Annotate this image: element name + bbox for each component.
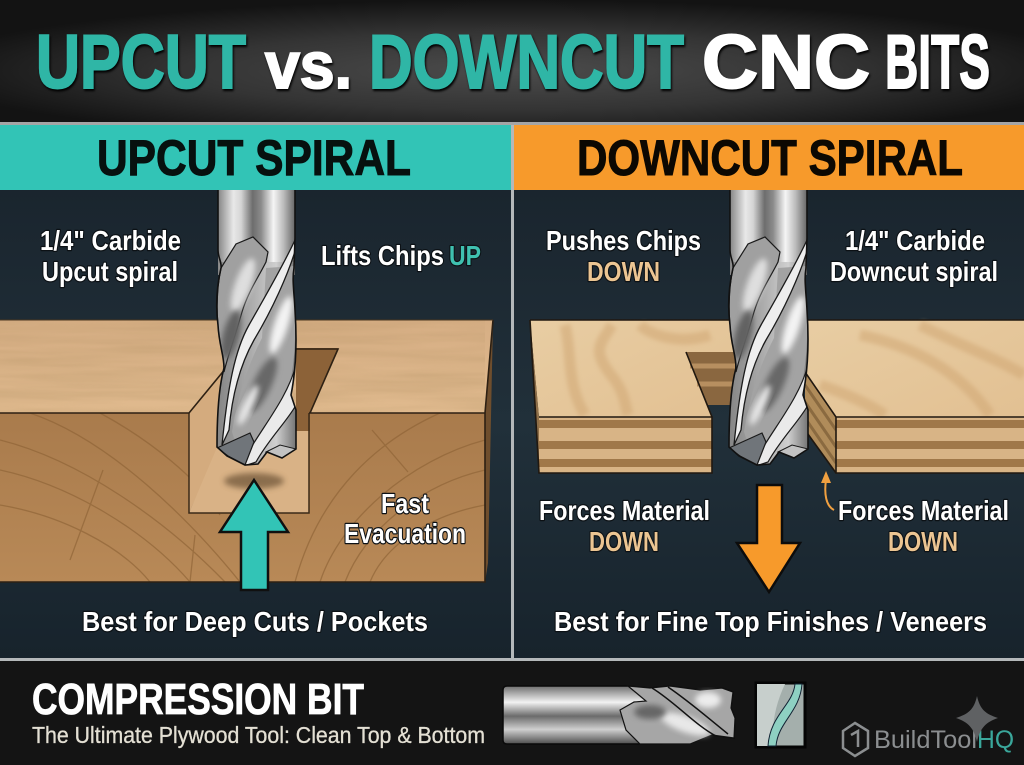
- footer subtitle: The Ultimate Plywood Tool: Clean Top & Bottom: [32, 722, 485, 748]
- label: bit type: Upcut spiral: [42, 256, 178, 287]
- label: bit type: [830, 225, 998, 287]
- logo: BuildToolHQ: [843, 723, 1014, 756]
- footer heading: COMPRESSION BIT: [32, 675, 364, 724]
- title: CNC: [702, 20, 870, 105]
- label: bit type: [40, 225, 181, 287]
- panel: downcut spiral: [514, 125, 1024, 658]
- label: best for deep cuts: Best for Deep Cuts / Pockets: [82, 606, 428, 637]
- label: fast evacuation: Fast: [381, 488, 429, 519]
- label: pushes chips down: Pushes Chips: [546, 225, 701, 256]
- title band: [0, 0, 1024, 125]
- label: pushes chips down: [546, 225, 701, 287]
- label: lifts chips up: Lifts Chips: [321, 240, 444, 271]
- title: vs.: [265, 28, 352, 102]
- title: DOWNCUT: [369, 20, 684, 105]
- wood block with pocket: [0, 320, 493, 582]
- label: lifts chips up: UP: [449, 240, 481, 271]
- label: bit type: 1/4" Carbide: [40, 225, 181, 256]
- label: forces material down (right): [838, 495, 1009, 557]
- label: fast evacuation: Evacuation: [344, 518, 466, 549]
- label: forces material down (right): DOWN: [888, 526, 958, 557]
- panel dividers: [0, 125, 1024, 661]
- label: pushes chips down: DOWN: [587, 256, 660, 287]
- plywood: left piece: [530, 320, 735, 473]
- arrow: chips up: [220, 480, 288, 590]
- label: bit type: 1/4" Carbide: [845, 225, 985, 256]
- drill bit: upcut: [217, 190, 297, 466]
- panel heading: [0, 125, 511, 190]
- shadow under bit: [224, 473, 284, 489]
- small arrow: [821, 471, 834, 510]
- panel background: [0, 190, 511, 658]
- logo: BuildToolHQ: BuildTool: [874, 726, 977, 754]
- panel heading: DOWNCUT SPIRAL: [577, 130, 963, 186]
- label: fast evacuation: [344, 488, 466, 549]
- logo: BuildToolHQ: HQ: [977, 726, 1014, 754]
- inset icon: cross section: [756, 683, 805, 747]
- panel: upcut spiral: [0, 125, 511, 658]
- title: UPCUT: [36, 20, 246, 105]
- compression bit illustration: [503, 686, 735, 744]
- footer: compression bit: [32, 675, 1014, 756]
- label: forces material down (left): DOWN: [589, 526, 659, 557]
- sparkle: [956, 696, 998, 742]
- label: forces material down (left): Forces Material: [539, 495, 710, 526]
- panel background: [514, 190, 1024, 658]
- panel heading: UPCUT SPIRAL: [97, 130, 411, 186]
- plywood: right piece: [805, 320, 1024, 473]
- label: forces material down (left): [539, 495, 710, 557]
- arrow: material down: [737, 485, 800, 592]
- label: best for fine finishes: Best for Fine Top Finishes / Veneers: [554, 606, 987, 637]
- title: [36, 20, 990, 105]
- drill bit: downcut: [729, 190, 809, 466]
